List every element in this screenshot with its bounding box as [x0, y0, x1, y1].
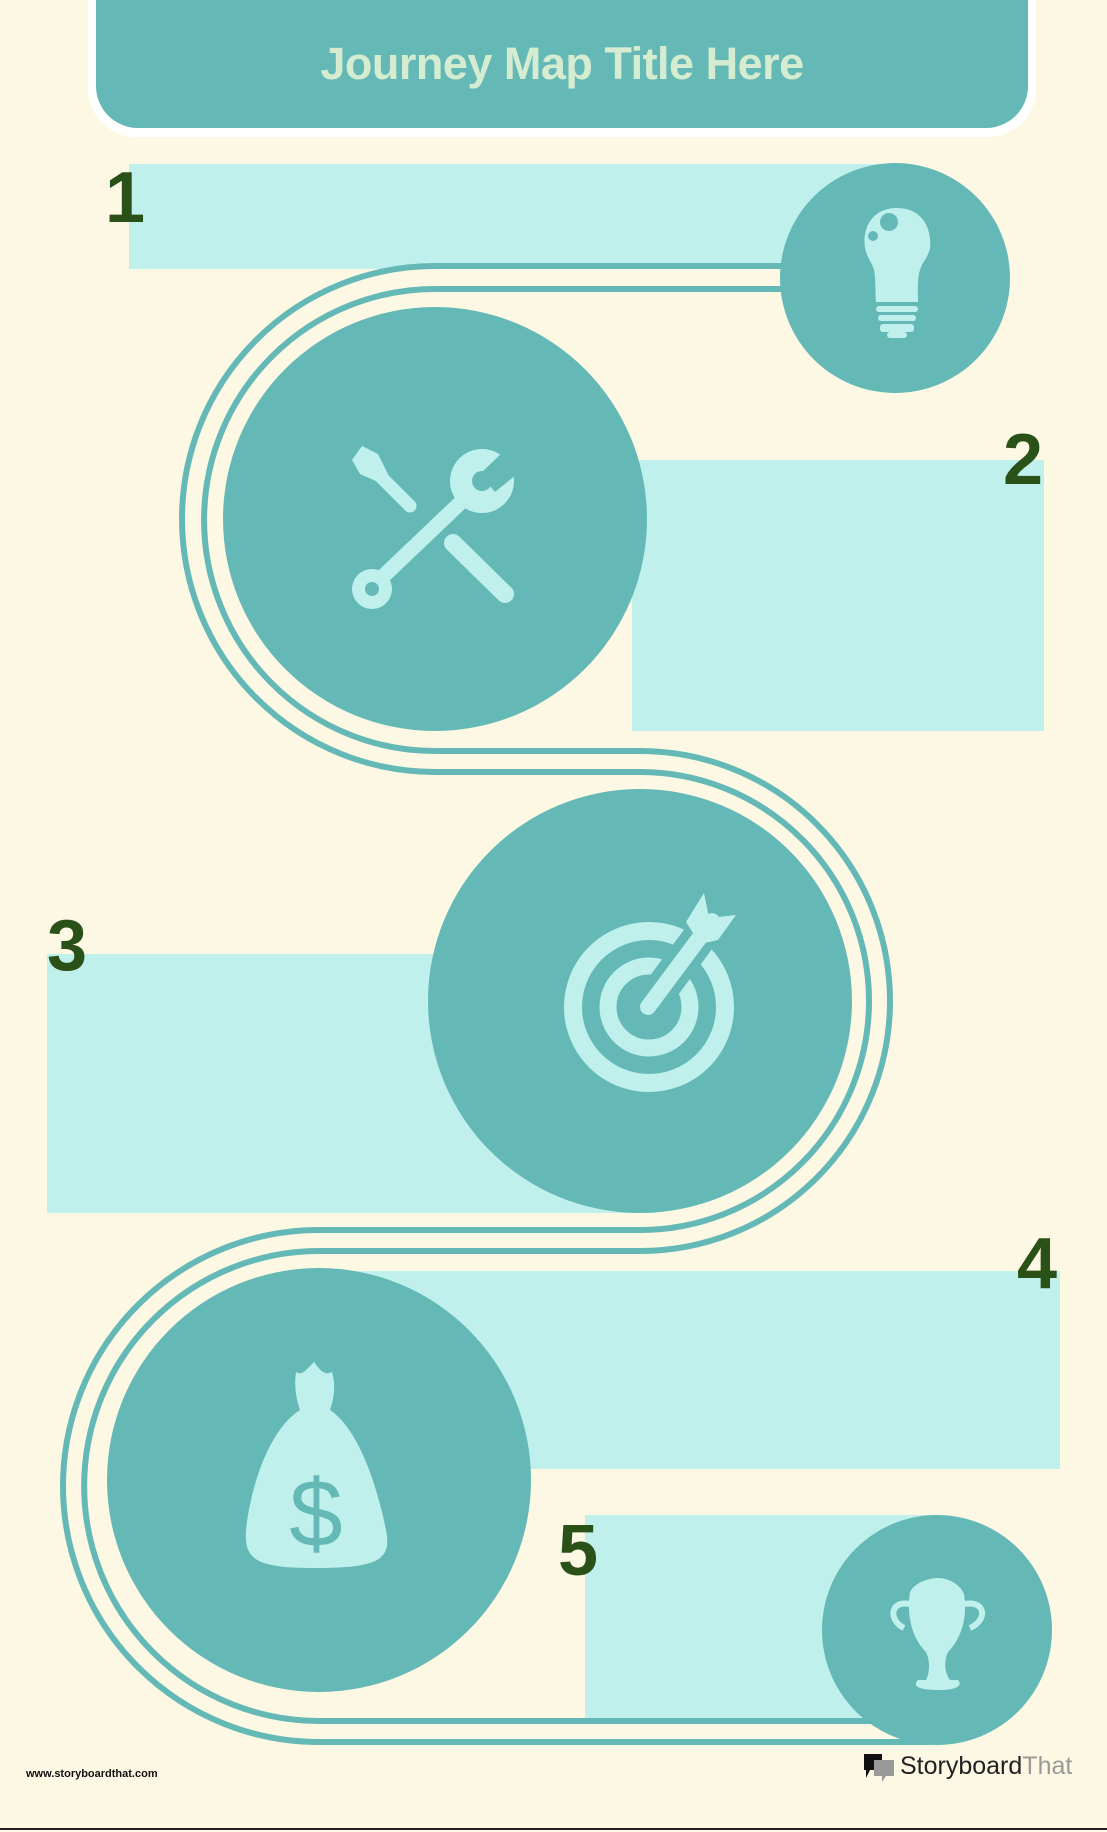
number 3: 3	[47, 906, 87, 986]
title: Journey Map Title Here	[320, 38, 804, 89]
circle 1: lightbulb	[780, 163, 1010, 393]
circle 5: trophy	[822, 1515, 1052, 1745]
box 5	[585, 1515, 936, 1718]
footer logo: StoryboardThat	[900, 1752, 1072, 1780]
footer url: www.storyboardthat.com	[26, 1768, 158, 1780]
title	[96, 0, 1028, 128]
box 1	[129, 164, 901, 269]
circle 4: money bag: $	[289, 1460, 343, 1567]
circle 2: tools	[223, 307, 647, 731]
number 5: 5	[558, 1511, 598, 1591]
box 3	[47, 954, 655, 1213]
bottom rule	[0, 1828, 1107, 1830]
road path	[63, 266, 930, 1742]
number 4: 4	[1017, 1224, 1057, 1304]
number 2: 2	[1003, 420, 1043, 500]
box 2	[632, 460, 1044, 731]
header banner	[88, 0, 1036, 137]
circle 4: money bag	[107, 1268, 531, 1692]
box 4	[351, 1271, 1060, 1469]
circle 3: target	[428, 789, 852, 1213]
number 1: 1	[105, 158, 145, 238]
